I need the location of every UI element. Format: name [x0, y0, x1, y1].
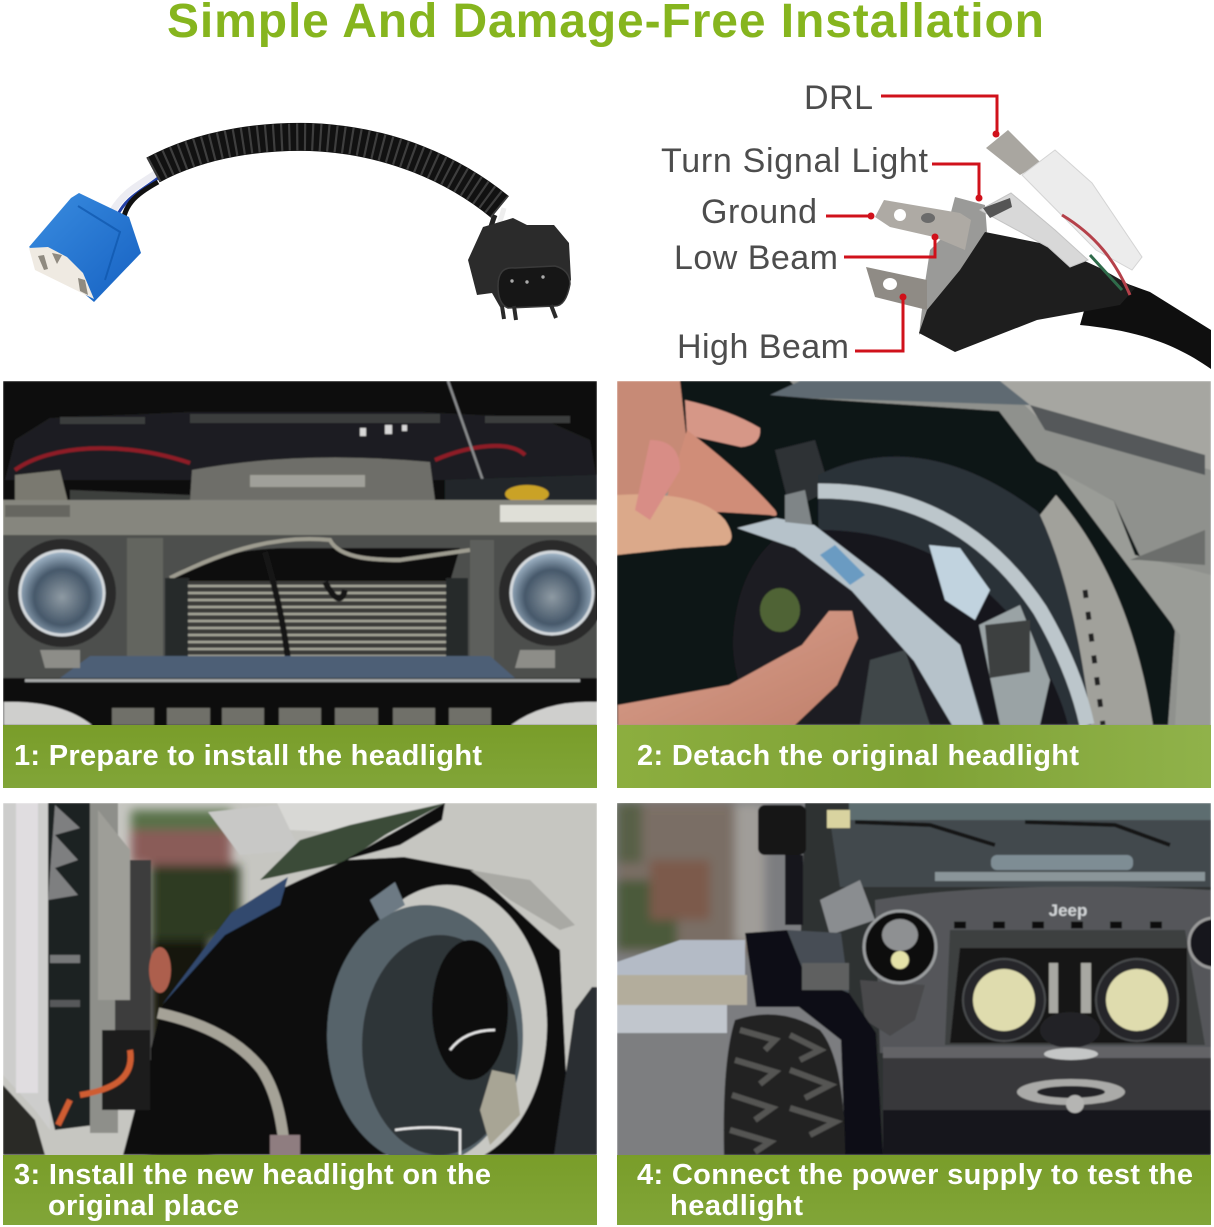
ring [327, 905, 523, 1165]
mirror [758, 805, 806, 855]
black connector [468, 218, 571, 320]
driving light left [963, 959, 1045, 1041]
bracket tab [785, 490, 812, 525]
dark ring [818, 457, 1114, 725]
label: High Beam: High Beam [677, 328, 849, 366]
panel: step 1 [3, 381, 605, 788]
left headlight [8, 539, 116, 647]
Jeep badge: Jeep [1049, 901, 1087, 920]
headlight [864, 911, 936, 983]
blue connector [29, 193, 141, 302]
spade connectors [986, 130, 1041, 175]
yellow reservoir cap [505, 485, 549, 503]
lens reflections [820, 530, 1068, 725]
black arch [617, 381, 1175, 725]
thumb [618, 611, 858, 725]
plug cable [1080, 272, 1211, 369]
photo: finished jeep [617, 803, 1214, 1225]
fender flare [745, 930, 883, 1155]
glass lens left [733, 535, 952, 725]
panel: step 2 [617, 381, 1211, 788]
right headlight [499, 540, 605, 646]
blurred background [131, 810, 240, 1155]
tire [724, 1014, 845, 1155]
panel: step 3: original place [48, 1190, 239, 1222]
photo: engine bay [3, 381, 597, 725]
pod light [827, 810, 850, 828]
metal flange [1040, 495, 1153, 725]
winch fairlead [1017, 1079, 1125, 1105]
wiring harness product image [29, 137, 571, 320]
label: Low Beam: Low Beam [674, 239, 838, 277]
panel: step 3 [3, 803, 597, 1225]
caption band [3, 725, 597, 788]
radiator support [3, 535, 597, 685]
grille face [875, 887, 1211, 1053]
fingertip [149, 947, 171, 993]
trees [617, 803, 765, 953]
caption band [3, 1155, 597, 1225]
label: Ground: Ground [701, 193, 817, 231]
caption: 2: Detach the original headlight [637, 740, 1079, 772]
caption band [617, 725, 1211, 788]
headlight back with fins [48, 803, 95, 1130]
metal back plate [919, 197, 988, 335]
wires [112, 172, 504, 232]
jeep body [800, 803, 1211, 1155]
right trim [554, 987, 597, 1155]
photo: detaching headlight [617, 381, 1211, 725]
red leader lines [881, 96, 997, 137]
headlight lens edge [3, 803, 50, 1130]
caption: 3: Install the new headlight on the [14, 1159, 491, 1191]
label: DRL: DRL [804, 79, 873, 117]
radiator [188, 580, 446, 654]
H4 plug photo with wire labels [661, 79, 1211, 369]
snowy ground [617, 940, 745, 975]
fingers and hand [617, 381, 687, 496]
white flange [393, 884, 548, 1155]
terminal blades [875, 200, 971, 250]
lens chrome rims [818, 491, 1087, 725]
caption: 4: Connect the power supply to test the [637, 1159, 1193, 1191]
driving light right [1096, 959, 1178, 1041]
dark light surround [945, 930, 1205, 1045]
bumper [883, 1047, 1211, 1155]
panel: step 4: headlight [670, 1190, 803, 1222]
panel: step 4 [617, 803, 1214, 1225]
plug housing [919, 232, 1135, 352]
panel under headlight [860, 980, 925, 1036]
fender [123, 857, 570, 1155]
label: Turn Signal Light: Turn Signal Light [661, 142, 929, 180]
chrome strip [737, 518, 983, 725]
grommet [774, 439, 825, 502]
terminals [480, 1070, 520, 1145]
cable [158, 1013, 285, 1150]
photo: installing headlight [3, 803, 597, 1155]
blue crossbar [60, 656, 515, 678]
caption band [617, 1155, 1211, 1225]
orange wires [58, 1050, 131, 1125]
corrugated sleeve [153, 137, 500, 207]
caption: 1: Prepare to install the headlight [14, 740, 482, 772]
winch [1040, 1012, 1100, 1048]
